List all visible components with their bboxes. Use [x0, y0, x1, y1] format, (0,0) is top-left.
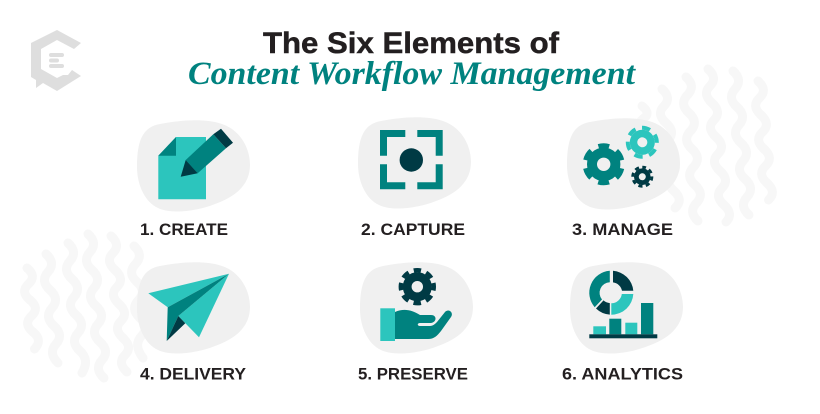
panel: 5. preserve [358, 262, 473, 383]
label: 6. ANALYTICS [562, 364, 683, 383]
logo: gray hexagon C mark [31, 30, 81, 91]
label: 2. CAPTURE [361, 220, 465, 239]
panel: 2. capture [358, 117, 471, 239]
label: 3. MANAGE [572, 220, 673, 239]
panel: 1. create [137, 120, 250, 239]
title [188, 27, 636, 92]
icon: paper plane [148, 274, 229, 341]
blob background [137, 120, 250, 211]
blob background [360, 262, 473, 353]
label: 4. DELIVERY [140, 364, 247, 383]
background squiggles: left [25, 234, 145, 378]
title line 2: Content Workflow Management [188, 56, 636, 92]
panel: 3. manage [567, 118, 680, 239]
icon: document and pencil [158, 129, 233, 199]
blob background [358, 117, 471, 208]
panel: 4. delivery [137, 262, 250, 383]
label: 5. PRESERVE [358, 364, 468, 383]
background squiggles: right [640, 69, 772, 222]
title line 1: The Six Elements of [263, 27, 560, 60]
icon: donut and bar chart [589, 271, 657, 338]
blob background [570, 262, 683, 353]
blob background [137, 262, 250, 353]
icon: hand holding gear [380, 270, 452, 341]
panel: 6. analytics [562, 262, 683, 383]
blob background [567, 118, 680, 209]
label: 1. CREATE [140, 220, 228, 239]
icon: three gears [585, 125, 660, 188]
icon: capture frame [380, 130, 443, 189]
